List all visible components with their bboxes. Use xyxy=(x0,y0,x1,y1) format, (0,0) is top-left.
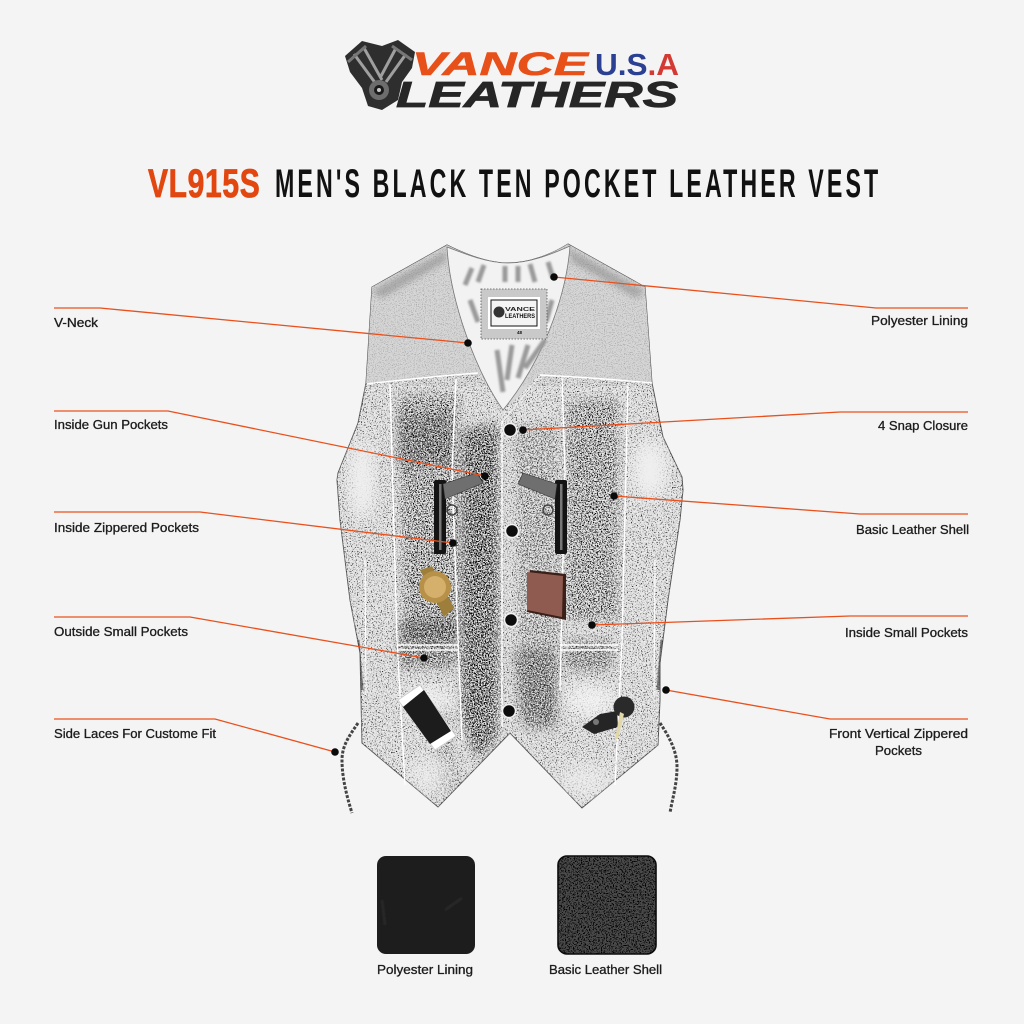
callout: Polyester Lining xyxy=(550,273,968,328)
callout: Inside Gun Pockets xyxy=(54,411,489,480)
lining xyxy=(447,246,570,410)
pocket flap right xyxy=(560,645,618,650)
stitching lines xyxy=(365,376,655,785)
callout: Front Vertical Zippered Pockets: Pockets xyxy=(875,744,922,758)
logo word: U.S.A: U.S.A xyxy=(595,47,679,82)
callout: Front Vertical Zippered Pockets xyxy=(662,686,968,758)
vest base xyxy=(337,244,683,808)
icon: smartphone xyxy=(398,685,456,750)
icon: left gun xyxy=(434,473,483,554)
icon: car keys xyxy=(582,696,634,739)
logo word: LEATHERS: LEATHERS xyxy=(396,74,678,115)
callout: Polyester Lining: Polyester Lining xyxy=(871,314,968,328)
callout: V-Neck: V-Neck xyxy=(54,316,99,330)
callout: Basic Leather Shell xyxy=(610,492,969,537)
callout: Inside Gun Pockets: Inside Gun Pockets xyxy=(54,418,168,432)
side seam dark edges xyxy=(358,640,662,690)
yoke seam xyxy=(367,373,652,384)
snap buttons xyxy=(502,424,518,718)
title text: product name: MEN'S BLACK TEN POCKET LEATHER VEST xyxy=(275,160,878,206)
callout: Front Vertical Zippered Pockets: Front Vertical Zippered xyxy=(829,727,968,741)
icon: right gun xyxy=(518,473,567,554)
callout: Outside Small Pockets xyxy=(54,617,428,662)
icon: wallet xyxy=(527,570,566,620)
vest illustration xyxy=(330,240,690,815)
yoke xyxy=(366,244,652,405)
callout: Inside Small Pockets: Inside Small Pockets xyxy=(845,626,968,640)
callout: Side Laces: Side Laces For Custome Fit xyxy=(54,727,217,741)
size label tag: VANCE xyxy=(505,307,536,313)
title code: VL915S: VL915S xyxy=(148,162,260,206)
swatch: basic leather shell: Basic Leather Shell xyxy=(549,963,662,977)
size label tag: 48 xyxy=(517,330,523,335)
side lace right xyxy=(660,723,677,813)
callout: Outside Small Pockets: Outside Small Pockets xyxy=(54,625,188,639)
icon: gold watch xyxy=(419,566,454,617)
callout: Inside Zippered Pockets xyxy=(54,512,457,547)
logo word: VANCE: VANCE xyxy=(412,46,591,82)
size label tag: LEATHERS xyxy=(505,314,535,320)
size label tag xyxy=(481,289,547,339)
vest texture xyxy=(330,240,690,815)
callouts xyxy=(54,273,969,758)
swatch: polyester lining: Polyester Lining xyxy=(377,963,473,977)
pocket flap left xyxy=(398,645,458,650)
callout: 4 Snap Closure: 4 Snap Closure xyxy=(878,419,968,433)
swatch: polyester lining xyxy=(377,856,475,977)
callout: Basic Leather Shell: Basic Leather Shell xyxy=(856,523,969,537)
callout: Inside Zippered Pockets: Inside Zippered Pockets xyxy=(54,521,199,535)
callout: 4 Snap Closure xyxy=(519,412,968,434)
side lace left xyxy=(342,723,358,813)
callout: V-Neck xyxy=(54,308,472,347)
callout: Side Laces xyxy=(54,719,339,756)
callout: Inside Small Pockets xyxy=(588,616,968,640)
title xyxy=(148,160,878,206)
icon: v-twin engine xyxy=(345,40,415,110)
swatch: basic leather shell xyxy=(549,856,662,977)
logo: Vance Leathers USA xyxy=(345,40,679,115)
